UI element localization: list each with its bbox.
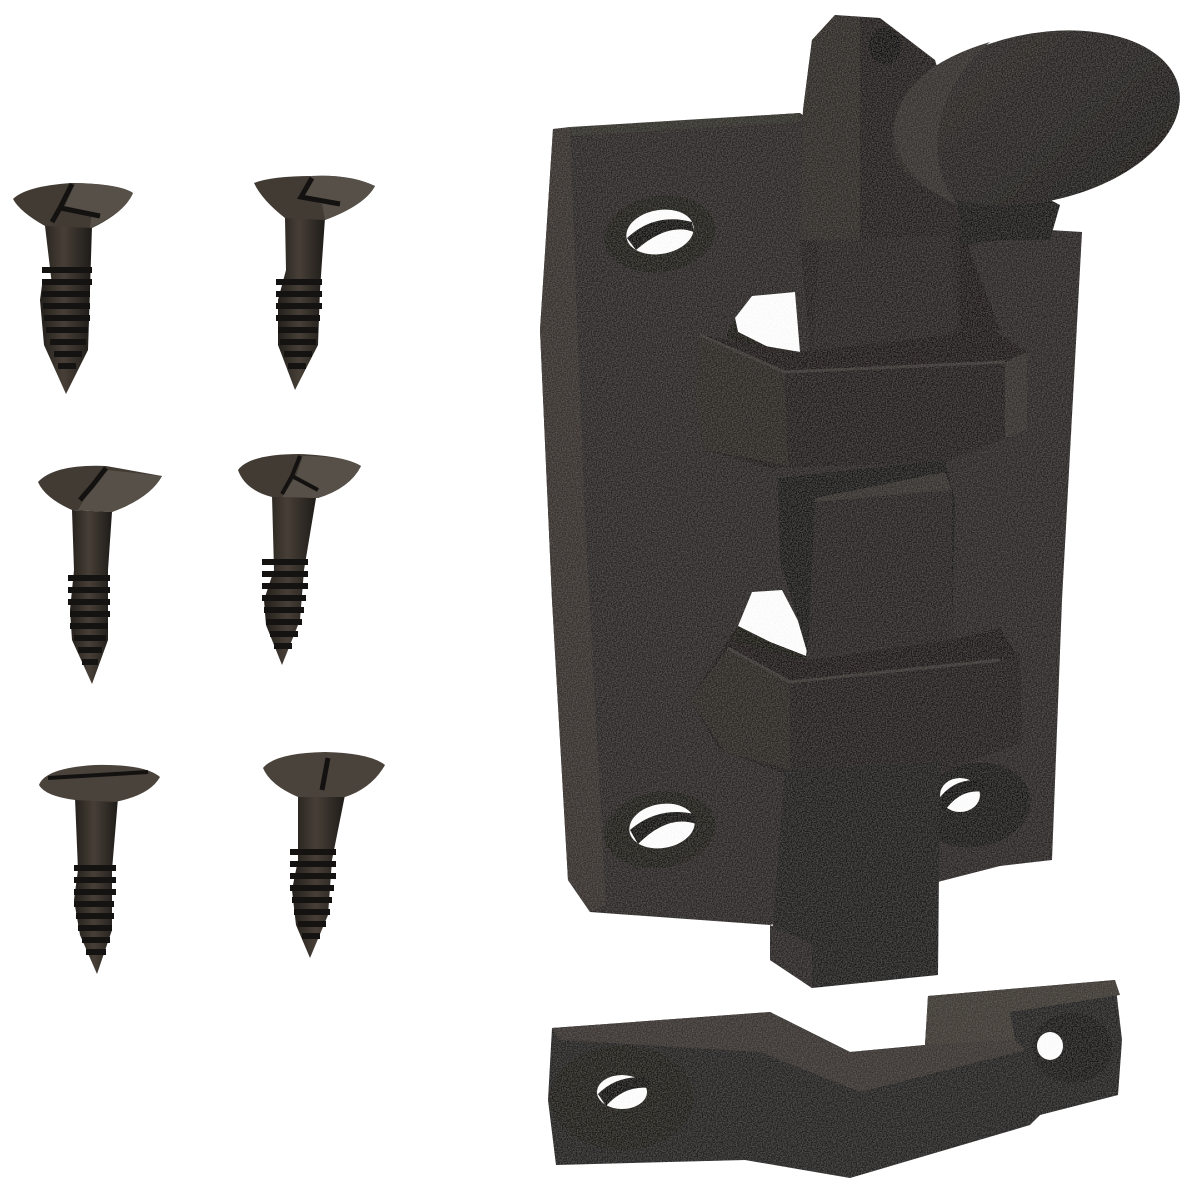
screw 6: [263, 752, 385, 958]
upper staple: [695, 318, 1027, 468]
screw 5: [39, 765, 160, 974]
screw 2: [254, 176, 375, 390]
plate hole: bottom left: [599, 785, 721, 875]
knob: [876, 5, 1196, 245]
latch: [540, 5, 1196, 988]
mounting plate: [540, 113, 1082, 925]
bolt: lower end: [770, 762, 940, 988]
bolt: upper shaft: [800, 15, 962, 350]
screw 1: [13, 183, 133, 394]
bolt: middle block: [778, 460, 955, 655]
screw 4: [238, 454, 361, 665]
plate hole: top left: [599, 189, 721, 279]
slots in plate: [735, 292, 800, 352]
lower staple: [690, 628, 1022, 772]
screw 3: [38, 466, 162, 684]
plate hole: bottom right: [913, 754, 1037, 856]
keeper: [548, 980, 1122, 1178]
